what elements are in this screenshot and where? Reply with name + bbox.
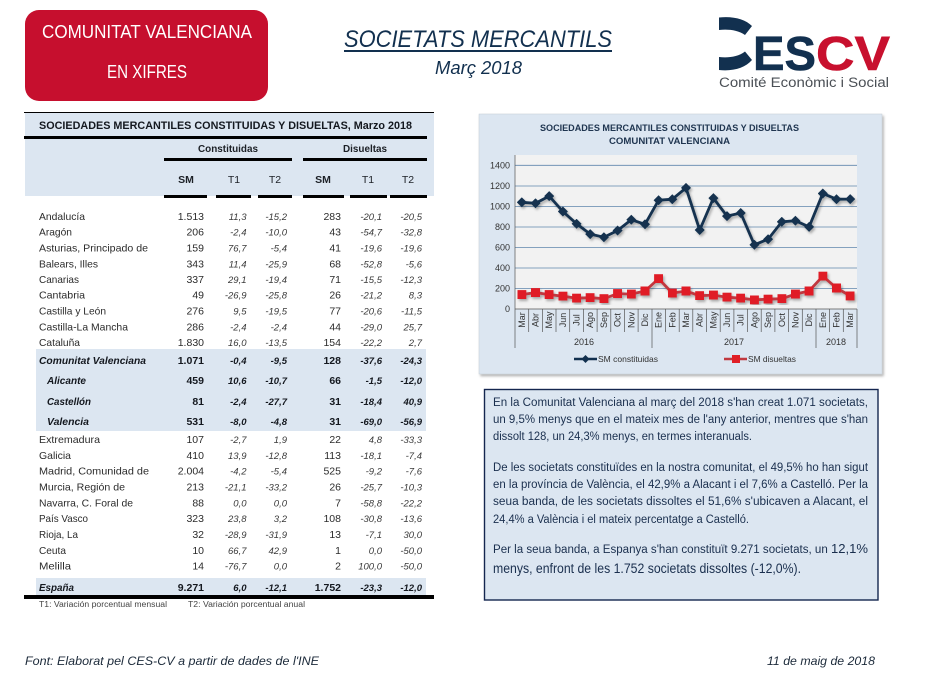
row: Madrid: -9,2	[366, 466, 383, 478]
column headers: SM	[178, 174, 194, 186]
x axis month labels: Sep	[763, 312, 773, 328]
row: Cantabria: -26,9	[225, 290, 247, 302]
row: Castellón	[47, 396, 423, 408]
row: Murcia: -25,7	[360, 482, 383, 494]
row: Aragón: -10,0	[265, 228, 288, 238]
x axis month labels: Oct	[777, 313, 787, 327]
row: Castellón: Castellón	[47, 396, 91, 408]
row: País Vasco: -13,6	[400, 514, 423, 525]
row: Cantabria: 26	[329, 290, 341, 302]
x axis month labels: Feb	[832, 312, 842, 328]
row: Comunitat Valenciana: -0,4	[230, 356, 247, 367]
badge: Comunitat Valenciana en xifres: EN XIFRES	[107, 62, 187, 82]
row: Extremadura	[39, 434, 423, 446]
row: Rioja	[39, 529, 423, 541]
row: Aragón: -32,8	[400, 228, 423, 238]
paragraph 2: De les societats constituïdes en la nostra comunitat, el 49,5% ho han sigut	[493, 462, 869, 474]
row: España: 1.752	[315, 582, 341, 594]
row: Melilla: Melilla	[39, 560, 71, 572]
x axis month labels: Mar	[845, 312, 855, 328]
row: Cataluña: 154	[323, 337, 341, 349]
row: Alicante: 10,6	[228, 376, 247, 387]
x axis month labels: May	[544, 311, 554, 329]
row: Cantabria: 49	[192, 290, 204, 302]
row: Comunitat Valenciana: -9,5	[271, 356, 288, 367]
row: Aragón	[39, 226, 423, 238]
row: Asturias	[39, 242, 423, 254]
row: Castellón: 40,9	[402, 397, 423, 408]
row: Extremadura: Extremadura	[39, 434, 100, 446]
row: País Vasco: País Vasco	[39, 513, 88, 525]
y axis labels	[490, 160, 510, 314]
row: Galicia: -7,4	[406, 451, 422, 462]
row: Valencia: 31	[329, 416, 341, 428]
row: Navarra: Navarra, C. Foral de	[39, 498, 133, 510]
x axis month labels: Dic	[640, 313, 650, 326]
row: Balears: Balears, Illes	[39, 258, 98, 270]
row: Castellón: 81	[192, 396, 204, 408]
row: Extremadura: 4,8	[369, 435, 383, 446]
row: Alicante: 459	[186, 375, 204, 387]
paragraph 1	[493, 397, 868, 443]
y axis labels: 400	[495, 263, 510, 273]
row: Castellón: 31	[329, 396, 341, 408]
title: Societats Mercantils	[344, 26, 612, 78]
table heading: SOCIEDADES MERCANTILES CONSTITUIDAS Y DISUELTAS, Marzo 2018	[39, 120, 412, 132]
row: Rioja: -28,9	[225, 530, 247, 541]
row: País Vasco: 108	[323, 513, 341, 525]
row: Castilla y León: -11,5	[401, 306, 423, 318]
row: Comunitat Valenciana: Comunitat Valenciana	[39, 355, 146, 367]
paragraph 3: menys, enfront de les 1.752 societats dissoltes (-12,0%).	[493, 561, 801, 576]
row: Murcia: -21,1	[225, 482, 246, 494]
y axis labels: 800	[495, 222, 510, 232]
column headers: T2	[269, 174, 281, 186]
x axis month labels: Jul	[736, 314, 746, 326]
row: Melilla: -50,0	[400, 562, 423, 572]
legend: SM constituidas	[598, 354, 658, 364]
row: Cataluña	[39, 337, 423, 349]
row: Canarias: -12,3	[400, 275, 423, 286]
table footnotes: T2: Variación porcentual anual	[188, 600, 305, 609]
row: Castilla-La Mancha: 25,7	[402, 322, 423, 334]
column headers: Disueltas	[343, 143, 387, 155]
row: España: 9.271	[178, 582, 204, 594]
row: Alicante: -12,0	[400, 376, 423, 387]
x axis month labels: Jul	[572, 314, 582, 326]
row: Andalucía	[39, 211, 423, 223]
row: Valencia: -4,8	[271, 417, 288, 428]
y axis labels: 0	[505, 304, 510, 314]
row: Navarra: -22,2	[400, 498, 423, 510]
row: Rioja: -31,9	[265, 530, 288, 541]
paragraph 3: Per la seua banda, a Espanya s'han constituït 9.271 societats, un 12,1%	[493, 541, 868, 556]
chart title: SOCIEDADES MERCANTILES CONSTITUIDAS Y DISUELTAS	[540, 123, 799, 134]
row: Madrid: 525	[323, 466, 341, 478]
row: Melilla: 100,0	[358, 562, 383, 572]
row: Rioja: 30,0	[404, 530, 423, 541]
row: Cataluña: 16,0	[228, 338, 247, 349]
row: Melilla: 2	[335, 560, 341, 572]
logo: CES CV	[719, 17, 890, 90]
row: España: -12,1	[265, 583, 287, 594]
row: Aragón: 206	[186, 226, 204, 238]
row: Cantabria: -21,2	[360, 290, 383, 302]
row: Canarias: 71	[329, 274, 341, 286]
paragraph 3	[493, 541, 868, 576]
row: Extremadura: -2,7	[230, 435, 247, 446]
row: Madrid	[39, 466, 423, 478]
row: Andalucía: 1.513	[178, 211, 204, 223]
x axis month labels: Ago	[749, 312, 759, 328]
row: Melilla	[39, 560, 423, 572]
row: Castilla-La Mancha: -2,4	[271, 322, 287, 334]
row: Aragón: 43	[329, 226, 341, 238]
row: Murcia	[39, 482, 423, 494]
row: Canarias: 29,1	[227, 275, 246, 286]
row: Balears: 11,4	[229, 260, 246, 270]
row: Extremadura: 22	[329, 434, 341, 446]
row: Balears: 68	[329, 258, 341, 270]
row: Rioja: -7,1	[366, 530, 382, 541]
row: Castilla-La Mancha: -29,0	[360, 322, 383, 334]
column headers: SM	[315, 174, 331, 186]
row: Castilla y León: 9,5	[233, 306, 247, 318]
row: Canarias: Canarias	[39, 274, 79, 286]
paragraph 2: 24,4% a València i el mateix percentatge a Castelló.	[493, 514, 749, 526]
row: Madrid: -7,6	[406, 466, 423, 478]
row: Galicia: -18,1	[360, 451, 382, 462]
row: Canarias: -15,5	[360, 275, 383, 286]
row: Ceuta: 0,0	[369, 546, 383, 557]
row: Castilla y León: -20,6	[360, 306, 383, 318]
row: Castilla y León: 276	[186, 306, 204, 318]
row: España: España	[39, 582, 74, 594]
row: Asturias: -19,6	[360, 244, 383, 254]
x axis month labels: May	[708, 311, 718, 329]
x axis month labels: Mar	[517, 312, 527, 328]
x axis month labels: Oct	[613, 313, 623, 327]
x axis month labels: Abr	[695, 313, 705, 327]
row: País Vasco: 23,8	[227, 514, 247, 525]
row: Alicante	[46, 375, 423, 387]
chart title	[540, 123, 799, 147]
row: Extremadura: 107	[186, 434, 204, 446]
y axis labels: 600	[495, 242, 510, 252]
legend: SM disueltas	[748, 354, 796, 364]
row: Comunitat Valenciana: -37,6	[360, 356, 383, 367]
row: Galicia	[39, 450, 422, 462]
row: Galicia: Galicia	[39, 450, 71, 462]
column headers	[178, 143, 414, 186]
row: Murcia: 26	[329, 482, 341, 494]
row: Castellón: -18,4	[360, 397, 383, 408]
row: Castilla-La Mancha	[39, 322, 423, 334]
row: Castilla-La Mancha: 286	[186, 322, 204, 334]
row: Madrid: -5,4	[271, 466, 287, 478]
row: Extremadura: -33,3	[400, 435, 423, 446]
row: Navarra: 0,0	[233, 498, 247, 510]
row: Alicante: -1,5	[366, 376, 383, 387]
paragraph 2	[493, 462, 869, 526]
x axis month labels: Ene	[654, 312, 664, 328]
paragraph 1: un 9,5% menys que en el mateix mes de l'any anterior, mentres que s'han	[493, 414, 868, 426]
y axis labels: 1200	[490, 181, 510, 191]
badge: Comunitat Valenciana en xifres: COMUNITAT VALENCIANA	[42, 22, 252, 42]
row: Andalucía: -20,5	[400, 212, 423, 223]
row: Castellón: -27,7	[265, 397, 288, 408]
row: Cataluña: 1.830	[178, 337, 204, 349]
x axis month labels: Mar	[681, 312, 691, 328]
row: España: 6,0	[233, 583, 247, 594]
row: Balears: -5,6	[406, 260, 423, 270]
row: País Vasco	[39, 513, 423, 525]
row: Castilla-La Mancha: -2,4	[230, 322, 246, 334]
row: Aragón: -2,4	[230, 228, 246, 238]
row: Asturias: 76,7	[228, 244, 247, 254]
row: Ceuta: 10	[192, 545, 204, 557]
x axis month labels	[517, 311, 855, 329]
row: Valencia: -8,0	[230, 417, 247, 428]
y axis labels: 1000	[490, 202, 510, 212]
row: Murcia: Murcia, Región de	[39, 482, 125, 494]
row: Navarra: 0,0	[274, 498, 288, 510]
x axis month labels: Jun	[722, 313, 732, 327]
row: Balears	[39, 258, 423, 270]
table footnotes	[39, 600, 305, 609]
row: Andalucía: Andalucía	[39, 211, 85, 223]
badge: Comunitat Valenciana en xifres	[25, 10, 268, 101]
row: Alicante: Alicante	[46, 375, 86, 387]
paragraph 2: seua banda, de les societats dissoltes el 51,6% s'ubicaven a Alacant, el	[493, 496, 868, 508]
row: Galicia: 113	[324, 450, 341, 462]
row: Comunitat Valenciana	[39, 355, 423, 367]
row: Melilla: 14	[192, 560, 204, 572]
x axis year labels	[574, 337, 846, 347]
row: Valencia: -69,0	[360, 417, 383, 428]
row: Asturias: -5,4	[271, 244, 287, 254]
x axis month labels: Feb	[667, 312, 677, 328]
row: Comunitat Valenciana: 128	[323, 355, 341, 367]
column headers: T2	[402, 174, 414, 186]
row: Andalucía: 283	[323, 211, 341, 223]
row: Castilla y León	[39, 306, 423, 318]
row: Ceuta: 1	[335, 545, 341, 557]
row: Cataluña: -22,2	[360, 338, 383, 349]
row: Ceuta: -50,0	[400, 546, 423, 557]
x axis year labels: 2018	[826, 337, 846, 347]
row: Castellón: -2,4	[230, 397, 247, 408]
row: País Vasco: 3,2	[274, 514, 288, 525]
row: Andalucía: 11,3	[229, 212, 247, 223]
row: Alicante: 66	[329, 375, 341, 387]
row: Madrid: -4,2	[230, 466, 247, 478]
row: Rioja: 32	[192, 529, 204, 541]
row: Cantabria	[39, 290, 423, 302]
row: Cantabria: 8,3	[409, 290, 423, 302]
row: Valencia: 531	[186, 416, 204, 428]
row: Ceuta: Ceuta	[39, 545, 66, 557]
row: España	[39, 582, 423, 594]
row: Canarias: -19,4	[265, 275, 287, 286]
row: Cataluña: Cataluña	[39, 337, 80, 349]
logo: CES CV: ES	[753, 28, 816, 81]
x axis month labels: Ene	[818, 312, 828, 328]
row: Galicia: 13,9	[228, 451, 247, 462]
title: Societats Mercantils: Març 2018	[435, 58, 522, 78]
table footnotes: T1: Variación porcentual mensual	[39, 600, 167, 609]
row: Melilla: -76,7	[225, 562, 247, 572]
row: Rioja: 13	[329, 529, 341, 541]
x axis month labels: Sep	[599, 312, 609, 328]
x axis year labels: 2016	[574, 337, 594, 347]
row: Aragón: -54,7	[360, 228, 383, 238]
row: Murcia: 213	[186, 482, 204, 494]
paragraph 2: en la província de València, el 42,9% a Alacant i el 7,6% a Castelló. Per la	[493, 479, 869, 491]
x axis year labels: 2017	[724, 337, 744, 347]
row: Cataluña: 2,7	[408, 338, 423, 349]
table: sociedades mercantiles	[24, 112, 434, 609]
footer: source: Font: Elaborat pel CES-CV a partir de dades de l'INE	[25, 654, 320, 668]
series: SM constituidas	[522, 188, 850, 245]
x axis month labels: Abr	[530, 313, 540, 327]
row: País Vasco: 323	[186, 513, 204, 525]
row: Cataluña: -13,5	[265, 338, 288, 349]
row: Valencia: Valencia	[47, 416, 89, 428]
column headers: T1	[228, 174, 240, 186]
row: Castilla y León: Castilla y León	[39, 306, 106, 318]
row: Andalucía: -20,1	[360, 212, 382, 223]
row: Comunitat Valenciana: -24,3	[400, 356, 423, 367]
legend	[574, 354, 796, 364]
row: Navarra	[39, 498, 423, 510]
logo: CES CV: Comité Econòmic i Social	[719, 75, 889, 90]
row: Balears: -52,8	[360, 260, 383, 270]
row: Galicia: -12,8	[265, 451, 288, 462]
row: Castilla y León: -19,5	[265, 306, 288, 318]
x axis month labels: Dic	[804, 313, 814, 326]
row: Aragón: Aragón	[39, 226, 72, 238]
row: Galicia: 410	[186, 450, 204, 462]
paragraph 1: dissolt 128, un 24,3% menys, en termes interanuals.	[493, 431, 752, 443]
row: Canarias	[39, 274, 423, 286]
row: Alicante: -10,7	[265, 376, 288, 387]
row: Ceuta: 66,7	[228, 546, 247, 557]
column headers: T1	[362, 174, 374, 186]
x axis month labels: Nov	[626, 312, 636, 328]
row: Rioja: Rioja, La	[39, 529, 78, 541]
row: Asturias: Asturias, Principado de	[39, 242, 148, 254]
row: Valencia	[47, 416, 423, 428]
row: Murcia: -10,3	[400, 482, 423, 494]
panel: commentary text	[484, 390, 878, 600]
row: Canarias: 337	[186, 274, 204, 286]
row: Asturias: 159	[186, 242, 204, 254]
row: Madrid: 2.004	[178, 466, 204, 478]
panel: line chart	[479, 114, 882, 374]
x axis month labels: Ago	[585, 312, 595, 328]
row: Melilla: 0,0	[274, 562, 288, 572]
footer: date: 11 de maig de 2018	[767, 654, 875, 668]
row: España: -23,3	[360, 583, 383, 594]
row: Cantabria: -25,8	[265, 290, 288, 302]
row: Navarra: 88	[192, 498, 204, 510]
row: Madrid: Madrid, Comunidad de	[39, 466, 149, 478]
series: SM disueltas	[522, 276, 850, 300]
row: Valencia: -56,9	[400, 417, 423, 428]
row: España: -12,0	[400, 583, 423, 594]
row: Balears: -25,9	[265, 260, 288, 270]
row: Extremadura: 1,9	[274, 435, 288, 446]
paragraph 1: En la Comunitat Valenciana al març del 2018 s'han creat 1.071 societats,	[493, 397, 868, 409]
row: Comunitat Valenciana: 1.071	[178, 355, 204, 367]
row: Balears: 343	[186, 258, 204, 270]
x axis month labels: Jun	[558, 313, 568, 327]
y axis labels: 1400	[490, 160, 510, 170]
row: Andalucía: -15,2	[265, 212, 288, 223]
row: País Vasco: -30,8	[360, 514, 383, 525]
row: Castilla-La Mancha: 44	[329, 322, 341, 334]
row: Castilla y León: 77	[329, 306, 341, 318]
row: Asturias: 41	[329, 242, 341, 254]
row: Asturias: -19,6	[400, 244, 423, 254]
row: Castilla-La Mancha: Castilla-La Mancha	[39, 322, 128, 334]
column headers: Constituidas	[198, 143, 258, 155]
row: Navarra: -58,8	[360, 498, 383, 510]
x axis month labels: Nov	[790, 312, 800, 328]
row: Ceuta	[39, 545, 423, 557]
logo: CES CV: CV	[816, 28, 890, 81]
row: Navarra: 7	[335, 498, 341, 510]
row: Cantabria: Cantabria	[39, 290, 85, 302]
row: Ceuta: 42,9	[268, 546, 288, 557]
row: Murcia: -33,2	[265, 482, 288, 494]
title: Societats Mercantils: SOCIETATS MERCANTILS	[344, 26, 612, 53]
chart title: COMUNITAT VALENCIANA	[609, 136, 730, 147]
y axis labels: 200	[495, 284, 510, 294]
